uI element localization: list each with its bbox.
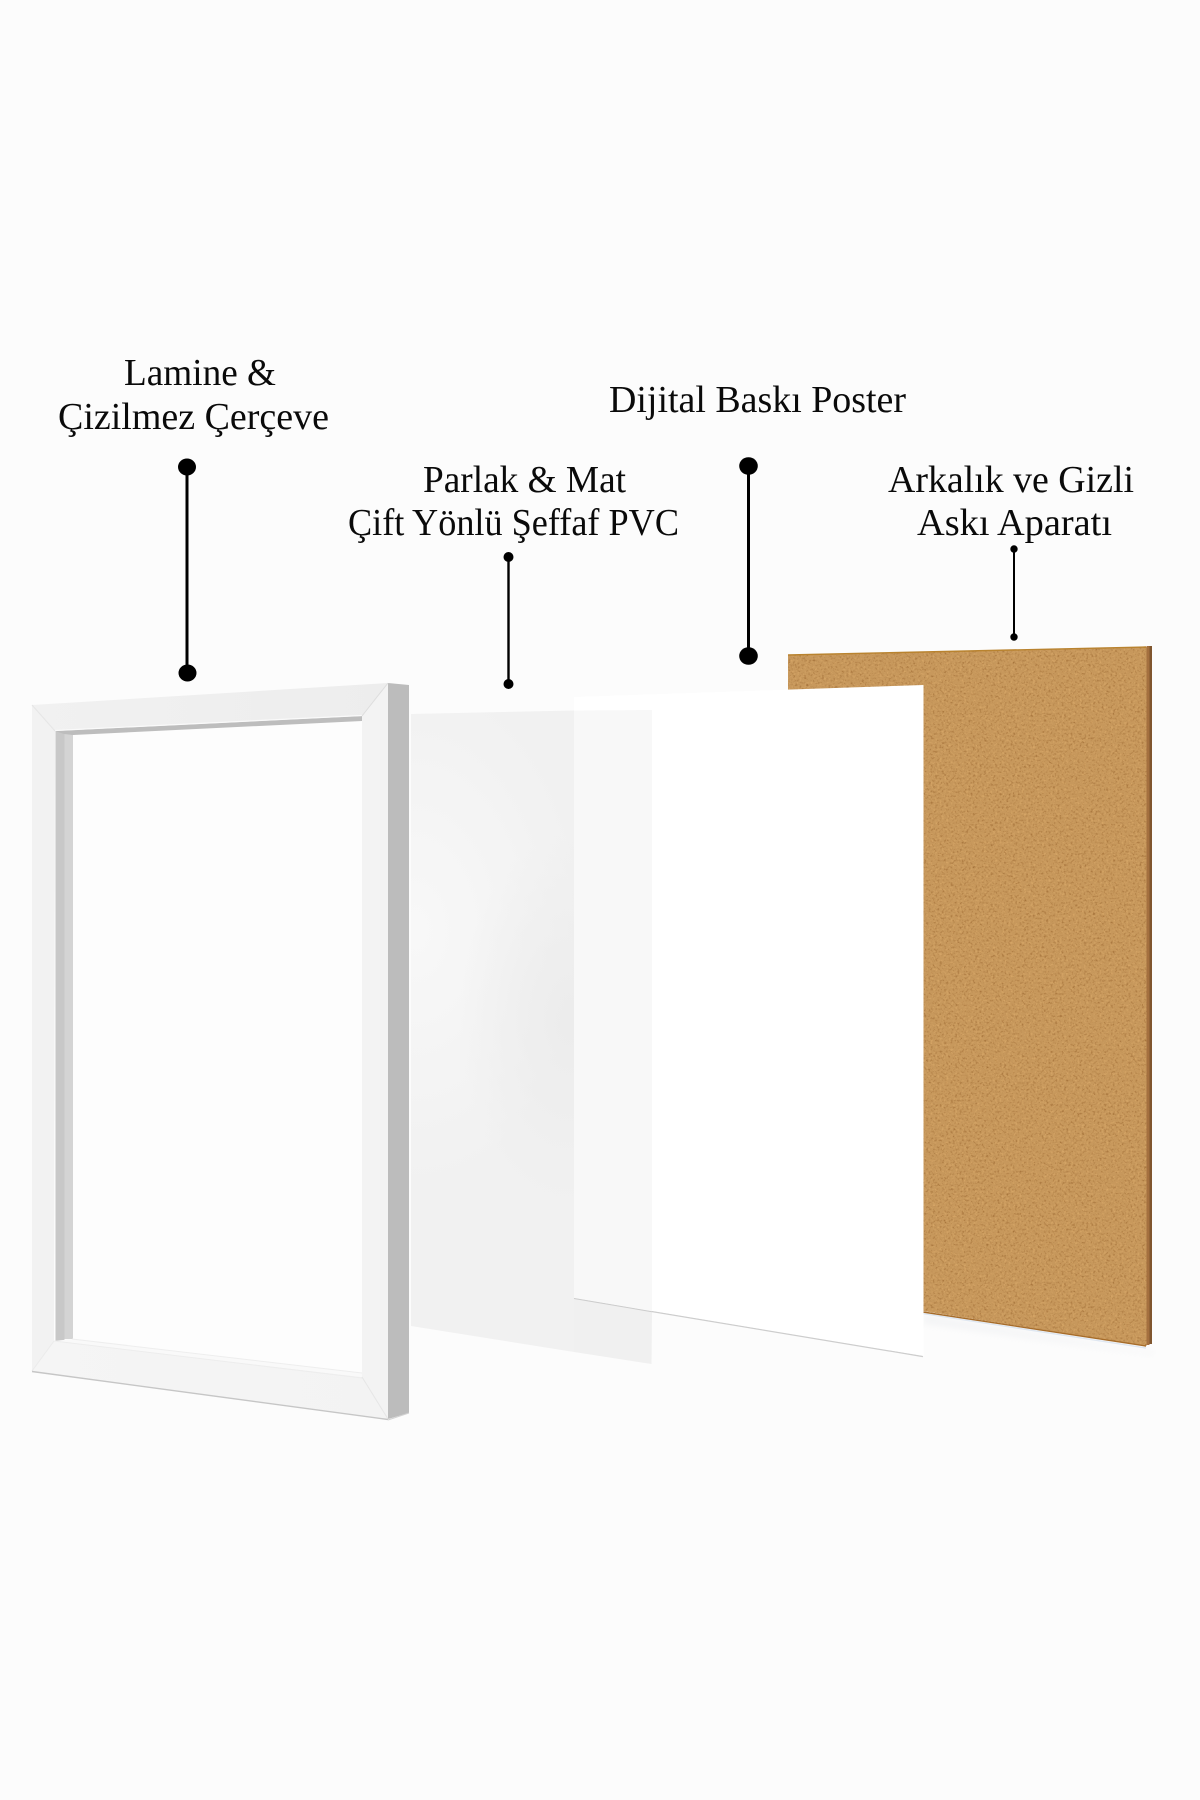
callout line: PVC [504,552,514,689]
frame inner rabbet left [56,731,73,1341]
frame side depth [388,683,409,1419]
label: backing: Askı Aparatı [917,502,1112,544]
label: frame: Lamine & [124,352,276,394]
label: backing: Arkalık ve Gizli [888,459,1134,501]
label: frame: Çizilmez Çerçeve [58,396,329,438]
printed poster sheet [574,685,924,1356]
frame right face [362,683,388,1419]
callout line: frame [178,458,196,682]
frame bottom face [32,1341,388,1419]
callout line: poster [739,457,758,665]
frame inner rabbet top [55,716,362,735]
backing board with hanger [788,646,1152,1354]
frame left face [32,705,55,1371]
frame opening [54,716,362,1377]
transparent PVC sheet [411,700,652,1364]
callout line: backing [1010,545,1018,641]
label: backing [888,459,1134,544]
label: PVC: Parlak & Mat [423,459,626,501]
label: frame [58,352,329,438]
frame top face [32,683,388,731]
label: PVC [348,459,679,544]
white laminated frame [32,683,409,1420]
label: PVC: Çift Yönlü Şeffaf PVC [348,502,679,544]
label: poster: Dijital Baskı Poster [609,379,906,421]
frame inner lip bottom [54,1339,362,1377]
